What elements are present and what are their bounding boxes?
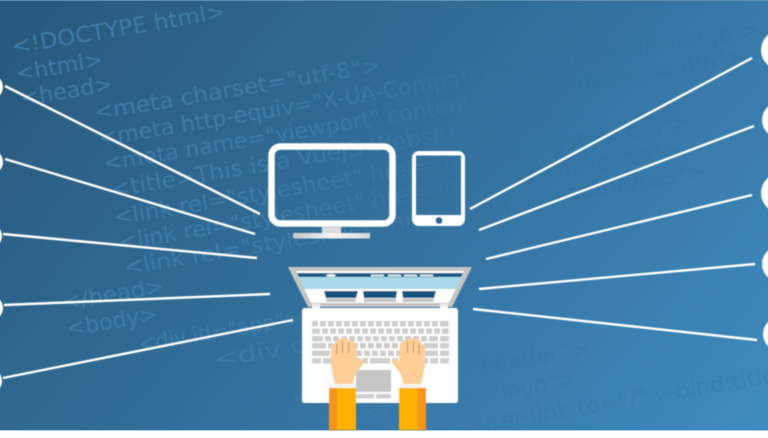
code text backdrop: <meta charset="utf-8">: [92, 53, 383, 126]
laptop: [288, 267, 472, 430]
icon: desktop monitor: [272, 146, 392, 238]
code text backdrop: <!DOCTYPE html>: [10, 0, 227, 60]
code text backdrop: <div class: [212, 324, 364, 373]
nodes: left circles: [0, 75, 3, 393]
code text backdrop: <title>This is a VueJS Website</title>: [109, 104, 557, 203]
touchpad: [356, 370, 391, 398]
laptop hinges: [312, 304, 448, 312]
code text backdrop: <link rel="stylesheet" href="assets/css/style.css">: [112, 110, 693, 231]
code text backdrop: <link rel="stylesheet" href="font-awesome/css">: [122, 159, 708, 281]
nodes: right circles: [761, 30, 768, 351]
code text backdrop: <meta http-equiv="X-UA-Compatible" content="IE=edge">: [97, 17, 762, 152]
icon: tablet: [412, 151, 465, 226]
code text backdrop: <meta name="viewport" content="width=device-width">: [102, 45, 747, 177]
laptop lid: [288, 267, 472, 307]
code text backdrop: <head>: [19, 72, 115, 112]
connector lines: right: [470, 58, 757, 340]
code text backdrop: <div id="app">: [137, 306, 304, 358]
code text backdrop: <h1 class="logo">: [362, 367, 578, 427]
code text backdrop: </head>: [60, 274, 167, 316]
left hand and sleeve: [329, 338, 364, 430]
connector lines: left: [3, 86, 293, 378]
code text backdrop: <link rel="stylesheet" href="assets/css/lake.css">: [117, 137, 683, 256]
code text backdrop: <html>: [14, 48, 105, 87]
right hand and sleeve: [392, 338, 426, 430]
code text backdrop: <header class="header">: [290, 337, 590, 411]
laptop base: [302, 308, 458, 403]
code text backdrop: <body>: [65, 302, 160, 342]
keyboard: [312, 321, 449, 364]
